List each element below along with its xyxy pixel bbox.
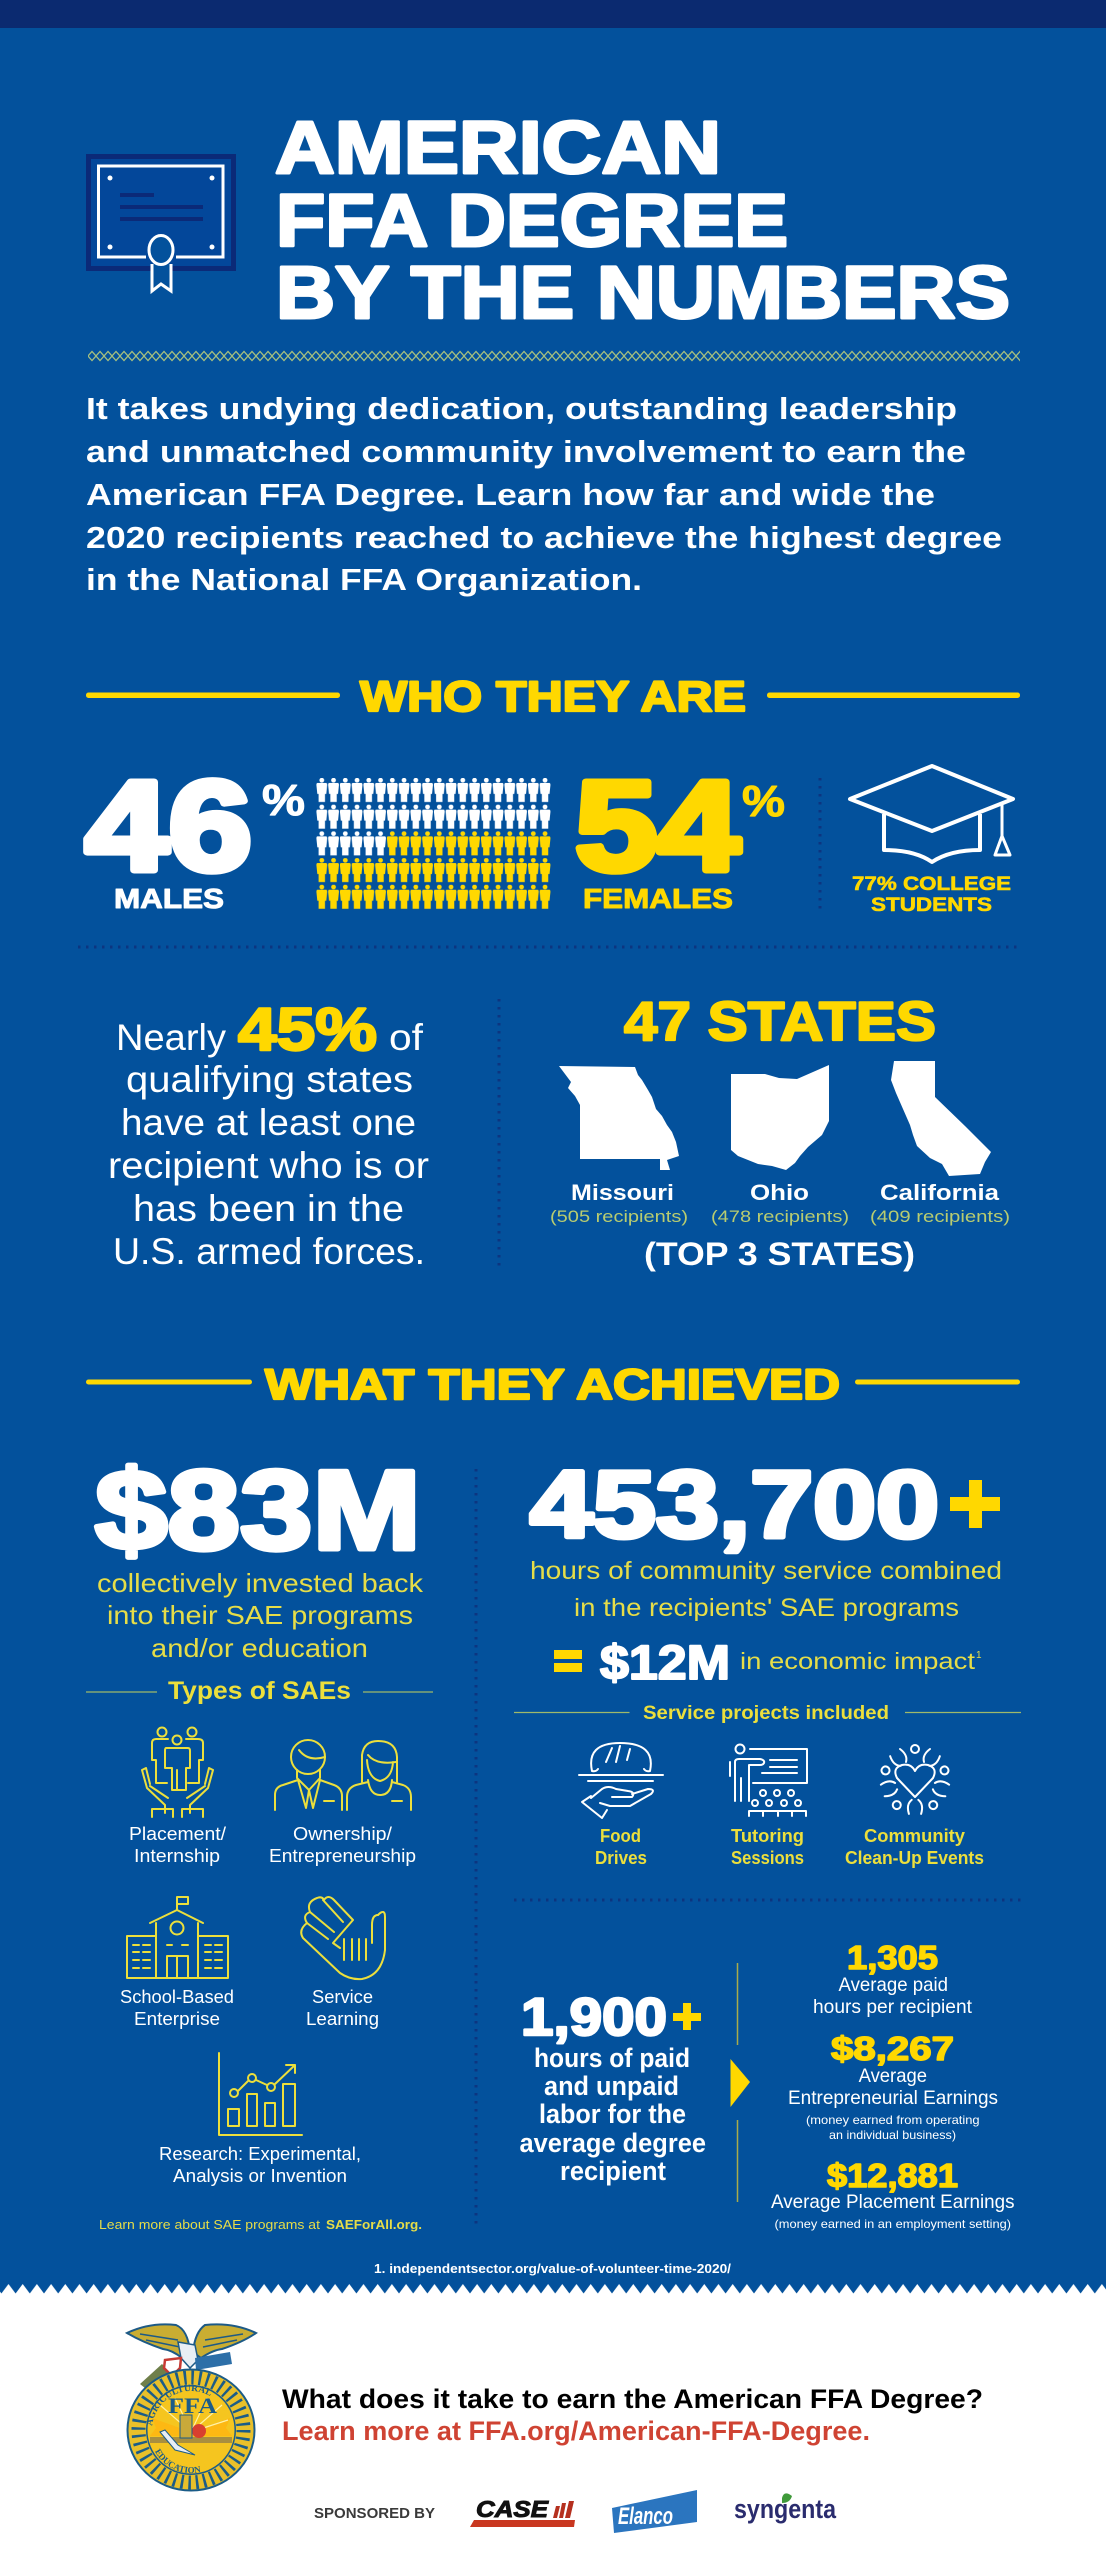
call to action: Learn more at FFA.org/American-FFA-Degree.: [282, 2416, 870, 2446]
text: invested back: collectively invested back: [97, 1568, 424, 1598]
stat: 46% males: %: [262, 776, 305, 825]
intro paragraph: It takes undying dedication, outstanding leadership: [86, 391, 957, 426]
icon: community clean-up: [877, 1745, 953, 1817]
label: research: [159, 2144, 361, 2186]
text: hours of paid and unpaid: [520, 2043, 706, 2186]
panel: gender split: [85, 755, 1013, 916]
intro paragraph: 2020 recipients reached to achieve the highest degree: [86, 520, 1002, 555]
stat: entrepreneurial earnings: [788, 2030, 998, 2142]
title: [275, 106, 1010, 334]
stat: $12M economic impact: in economic impact: [740, 1648, 976, 1674]
logo: Elanco: [612, 2490, 697, 2533]
medallion: AGRICULTURAL: [146, 2384, 211, 2426]
subheading: types of SAEs: Types of SAEs: [168, 1677, 351, 1705]
text block: armed forces: qualifying states: [126, 1059, 413, 1100]
logo: Case IH: [470, 2496, 575, 2527]
stat: paid hours: [813, 1939, 973, 2018]
text: hours of paid and unpaid: average degree: [520, 2128, 706, 2158]
panel: labor hours: [520, 1939, 1015, 2231]
stat: $12M economic impact: $12M: [600, 1637, 730, 1690]
stat: 54% females: FEMALES: [583, 883, 733, 914]
text: invested back: into their SAE programs: [107, 1600, 413, 1630]
stat: 54% females: %: [742, 777, 785, 826]
stat: placement earnings: (money earned in an employment setting): [774, 2217, 1011, 2231]
stat: $12M economic impact: 1: [976, 1650, 982, 1661]
title: FFA DEGREE: [276, 179, 788, 262]
label: research: Analysis or Invention: [173, 2166, 347, 2186]
text: hours of paid and unpaid: and unpaid: [544, 2071, 679, 2101]
labels: school, service: Learning: [306, 2009, 379, 2029]
medallion: FFA: [168, 2393, 217, 2418]
logo: Elanco: Elanco: [618, 2503, 673, 2530]
sponsors: SPONSORED BY: [314, 2505, 435, 2522]
eagle and crest: [127, 2324, 256, 2392]
section heading: who they are: WHO THEY ARE: [360, 673, 746, 721]
stat: college students: 77% COLLEGE: [852, 873, 1011, 895]
labels: placement, ownership: [129, 1824, 416, 1866]
text: hours of community service: [530, 1557, 1002, 1622]
header: [86, 106, 1020, 597]
state labels: (505 recipients): [550, 1207, 688, 1226]
labels: service projects: Community: [864, 1826, 965, 1846]
section heading: who they are: [86, 673, 1020, 721]
heading: 47 states: 47 STATES: [624, 990, 936, 1052]
divider: [78, 946, 1021, 948]
icon: graduation cap: [850, 766, 1013, 862]
medallion: EDUCATION: [154, 2448, 200, 2474]
stat: $12M economic impact: [554, 1637, 982, 1690]
label: research: Research: Experimental,: [159, 2144, 361, 2164]
text block: armed forces: U.S. armed forces.: [113, 1231, 425, 1272]
map: Missouri: [559, 1066, 679, 1170]
text block: armed forces: of: [389, 1017, 424, 1058]
icon: research chart: [219, 2053, 302, 2135]
map: Ohio: [731, 1065, 829, 1170]
labels: school, service: School-Based: [120, 1987, 234, 2007]
footer panel: [0, 2284, 1106, 2560]
panel: SAE investment: [86, 1447, 433, 2232]
intro paragraph: [86, 391, 1002, 597]
call to action: What does it take to earn the American FFA Degree?: [282, 2384, 983, 2414]
labels: school, service: Service: [312, 1987, 373, 2007]
stat: paid hours: hours per recipient: [813, 1996, 973, 2018]
text: hours of paid and unpaid: labor for the: [539, 2099, 686, 2129]
section heading: what they achieved: [86, 1361, 1020, 1409]
logo: FFA emblem: [125, 2323, 258, 2492]
panel: community service: [514, 1452, 1021, 1868]
icon: placement internship: [142, 1728, 213, 1817]
intro paragraph: American FFA Degree. Learn how far and wide the: [86, 477, 935, 512]
labels: placement, ownership: Placement/: [129, 1824, 226, 1844]
stat: college students: STUDENTS: [871, 894, 992, 916]
labels: service projects: [595, 1826, 984, 1868]
text block: armed forces: recipient who is or: [108, 1145, 429, 1186]
state labels: [550, 1180, 1010, 1226]
icon: diploma certificate: [88, 156, 234, 291]
subheading: service projects: Service projects included: [643, 1703, 889, 1724]
icon: hand service learning: [301, 1897, 385, 1979]
stat: entrepreneurial earnings: an individual business): [829, 2128, 956, 2142]
labels: service projects: Drives: [595, 1848, 647, 1868]
stat: 1,900+: 1,900: [521, 1988, 667, 2047]
diamond chain divider: [88, 350, 1020, 362]
stat: 46% males: [85, 755, 305, 914]
footnote: 1. independentsector.org/value-of-volunteer-time-2020/: [374, 2262, 732, 2276]
icon: food drives: [579, 1743, 663, 1818]
stat: 453,700+: 453,700: [530, 1452, 939, 1558]
call to action: [282, 2384, 983, 2446]
text block: armed forces: [108, 996, 429, 1272]
labels: school, service: Enterprise: [134, 2009, 220, 2029]
labels: service projects: Tutoring: [731, 1826, 804, 1846]
stat: paid hours: Average paid: [838, 1974, 948, 1996]
section heading: what they achieved: WHAT THEY ACHIEVED: [265, 1361, 840, 1409]
icon: school: [127, 1897, 228, 1978]
labels: school, service: [120, 1987, 379, 2029]
stat: 54% females: 54: [575, 755, 740, 898]
intro paragraph: in the National FFA Organization.: [86, 562, 642, 597]
chart: 100 people pictogram: [316, 778, 551, 912]
link note: SAE for all: Learn more about SAE programs at: [99, 2217, 320, 2232]
stat: entrepreneurial earnings: Average: [859, 2065, 927, 2087]
text: hours of paid and unpaid: hours of paid: [534, 2043, 690, 2073]
link note: SAE for all: SAEForAll.org.: [326, 2217, 422, 2232]
state labels: Missouri: [571, 1180, 674, 1205]
link note: SAE for all: [99, 2217, 422, 2232]
title: BY THE NUMBERS: [276, 251, 1010, 334]
stat: paid hours: 1,305: [847, 1939, 938, 1976]
text: hours of paid and unpaid: recipient: [560, 2156, 666, 2186]
text: invested back: [97, 1568, 424, 1663]
icon: tutoring sessions: [730, 1744, 807, 1816]
labels: service projects: Sessions: [731, 1848, 804, 1868]
title: AMERICAN: [275, 106, 721, 189]
stat: placement earnings: [771, 2157, 1015, 2231]
stat: 46% males: 46: [85, 755, 252, 898]
caption: top 3 states: (TOP 3 STATES): [644, 1236, 915, 1272]
text block: armed forces: has been in the: [133, 1188, 404, 1229]
stat: 54% females: [575, 755, 785, 914]
logo: Syngenta: syngenta: [734, 2494, 837, 2524]
text block: armed forces: Nearly: [116, 1017, 227, 1058]
stat: $83M: $83M: [95, 1447, 421, 1573]
icon: ownership entrepreneurship: [275, 1740, 411, 1810]
map: California: [891, 1061, 991, 1176]
labels: placement, ownership: Ownership/: [293, 1824, 392, 1844]
logo: Case IH: CASE: [476, 2496, 549, 2522]
stat: entrepreneurial earnings: $8,267: [831, 2030, 954, 2067]
stat: placement earnings: $12,881: [827, 2157, 958, 2194]
labels: service projects: Clean-Up Events: [845, 1848, 984, 1868]
stat: 46% males: MALES: [114, 883, 224, 914]
arrow: [730, 1963, 750, 2202]
state labels: (478 recipients): [711, 1207, 849, 1226]
stat: entrepreneurial earnings: (money earned from operating: [806, 2113, 980, 2127]
state labels: (409 recipients): [870, 1207, 1010, 1226]
state labels: Ohio: [750, 1180, 809, 1205]
top band: [0, 0, 1106, 28]
sponsors: [314, 2490, 837, 2533]
labels: placement, ownership: Entrepreneurship: [269, 1846, 416, 1866]
stat: entrepreneurial earnings: Entrepreneurial Earnings: [788, 2087, 998, 2109]
text block: armed forces: have at least one: [121, 1102, 416, 1143]
stat: college students: [820, 766, 1013, 916]
medallion: [126, 2368, 256, 2492]
text: hours of community service: hours of community service combined: [530, 1557, 1002, 1585]
text block: armed forces: 45%: [238, 996, 377, 1063]
panel: top states: [550, 990, 1010, 1272]
labels: service projects: Food: [600, 1826, 641, 1846]
text: invested back: and/or education: [151, 1633, 368, 1663]
intro paragraph: and unmatched community involvement to earn the: [86, 434, 966, 469]
text: hours of community service: in the recipients' SAE programs: [574, 1594, 959, 1622]
stat: placement earnings: Average Placement Earnings: [771, 2191, 1015, 2213]
state labels: California: [880, 1180, 1000, 1205]
labels: placement, ownership: Internship: [134, 1846, 220, 1866]
